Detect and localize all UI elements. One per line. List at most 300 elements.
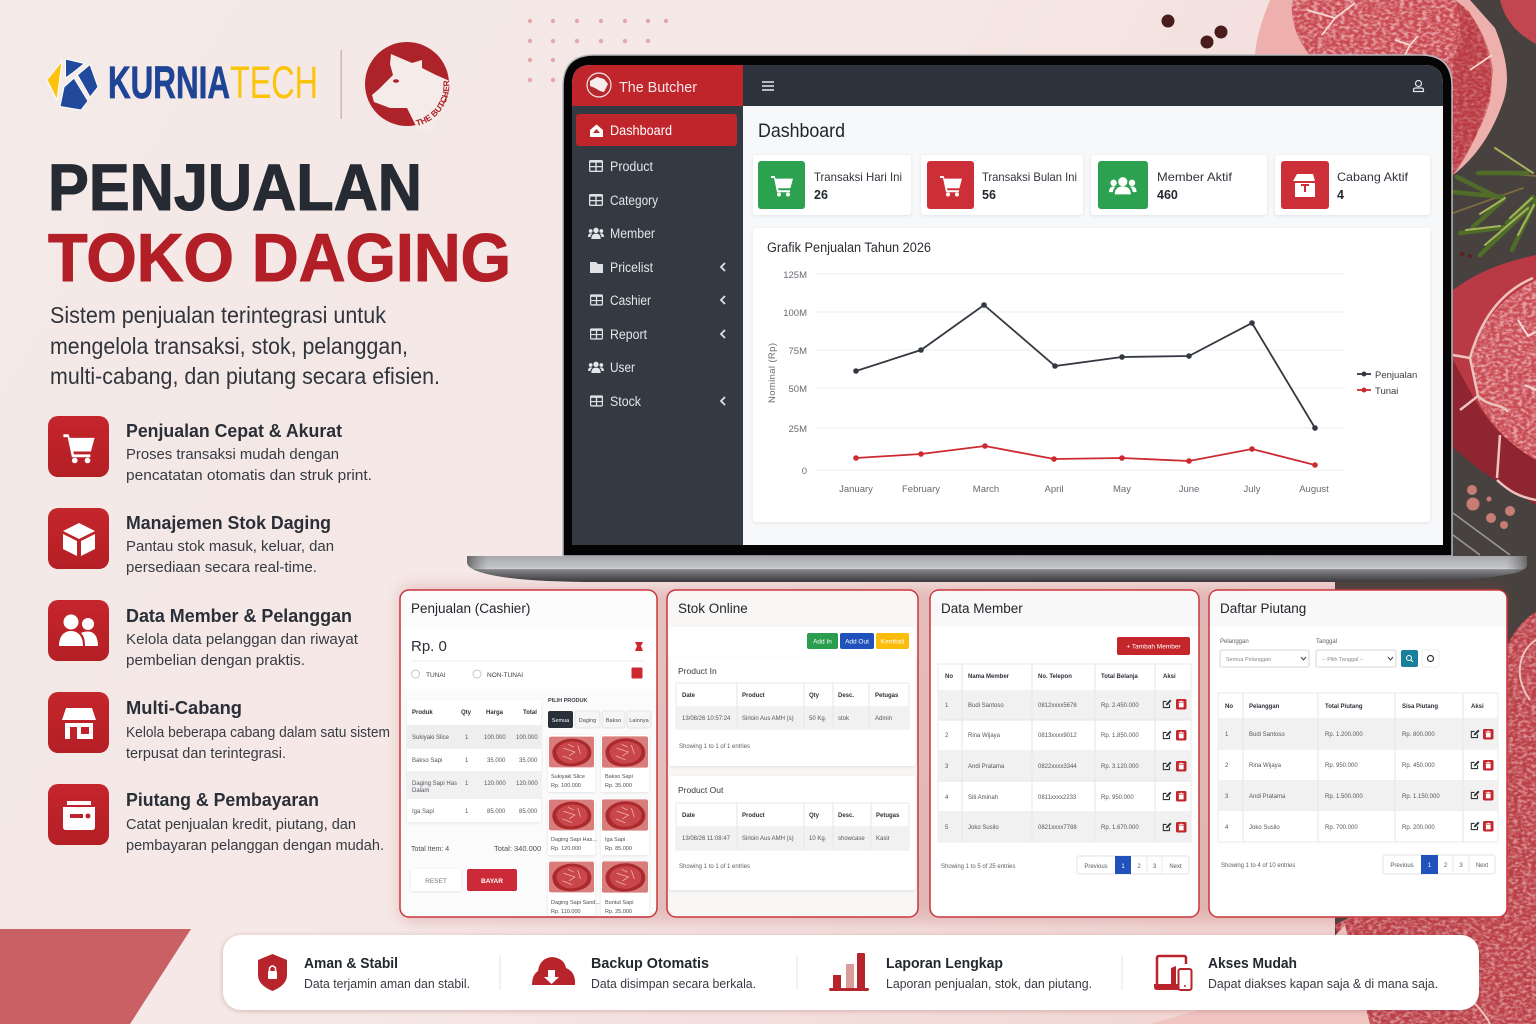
- piutang table: Sisa Piutang: [1402, 704, 1438, 710]
- cashier table: Iga Sapi: [412, 809, 434, 815]
- icon: hexagon mark: [47, 59, 98, 110]
- sidebar brand: [572, 65, 743, 106]
- pagination: Previous: [1084, 864, 1108, 870]
- category tabs: Lainnya: [629, 718, 650, 724]
- member table: Siti Aminah: [968, 795, 998, 801]
- product: iga: Iga Sapi: [605, 837, 625, 843]
- title: [48, 150, 511, 296]
- bottom benefits bar: [223, 935, 1479, 1010]
- menu: Category: Category: [610, 193, 658, 208]
- toolbar: Kembali: [881, 638, 904, 646]
- cashier table: Harga: [486, 710, 504, 716]
- panel: cashier: [400, 590, 657, 917]
- product: has dalam: Rp. 120.000: [551, 846, 581, 852]
- table: product out: Desc.: [838, 813, 854, 819]
- button: refresh: [1422, 650, 1439, 667]
- piutang table: Aksi: [1471, 704, 1484, 710]
- y axis labels: 100M: [783, 308, 807, 319]
- table: product out: [676, 803, 909, 850]
- action icons: [1163, 699, 1186, 832]
- card: product in: Showing 1 to 1 of 1 entries: [679, 744, 750, 750]
- member table: 3: [945, 764, 949, 770]
- piutang table: Rp. 450.000: [1402, 763, 1435, 769]
- menu: Report: Report: [610, 327, 647, 342]
- feature: multi-cabang: Multi-Cabang: [126, 697, 242, 718]
- title: PENJUALAN: [48, 150, 422, 224]
- member table: Rp. 3.120.000: [1101, 764, 1139, 770]
- cashier table: Sukiyaki Slice: [412, 735, 450, 741]
- product: bakso: [601, 735, 649, 792]
- product: has dalam: [548, 798, 597, 855]
- panel heading: Data Member: [941, 601, 1023, 616]
- menu: Pricelist: [590, 260, 725, 275]
- benefit: laporan: Laporan penjualan, stok, dan piutang.: [886, 977, 1092, 991]
- cashier totals: [411, 844, 541, 853]
- member table: 0811xxxx2233: [1038, 795, 1077, 801]
- piutang table: 1: [1225, 732, 1229, 738]
- toolbar: Add Out: [845, 638, 869, 646]
- decorative dot grid: [528, 19, 668, 82]
- icon: user: [1414, 80, 1424, 92]
- cashier table: 35.000: [519, 758, 538, 764]
- sidebar: [572, 65, 743, 545]
- y axis labels: 0: [802, 466, 807, 477]
- button: reset: RESET: [425, 878, 447, 885]
- piutang table: Rp. 1.500.000: [1325, 794, 1363, 800]
- laptop bezel: [563, 55, 1452, 556]
- product: iga: [601, 798, 649, 855]
- x axis labels: April: [1044, 484, 1064, 495]
- benefit: aman: Aman & Stabil: [304, 955, 398, 972]
- benefit: aman: Data terjamin aman dan stabil.: [304, 977, 470, 991]
- stat card: transaksi hari ini: 26: [814, 188, 828, 202]
- y axis labels: 50M: [789, 384, 807, 395]
- laptop: [467, 55, 1527, 582]
- panel: data member: [930, 590, 1199, 917]
- x axis labels: February: [902, 484, 940, 495]
- piutang table: 2: [1225, 763, 1229, 769]
- product: buntut: Buntut Sapi: [605, 900, 633, 906]
- x axis labels: June: [1179, 484, 1199, 495]
- pagination: Next: [1476, 863, 1488, 869]
- pagination: Previous: [1390, 863, 1414, 869]
- decorative meat: right steak: [1453, 255, 1536, 505]
- table: product out: 13/08/26 11:08:47: [682, 836, 731, 842]
- top bar: [743, 65, 1443, 106]
- benefit: backup: Data disimpan secara berkala.: [591, 977, 756, 991]
- benefit: akses: Akses Mudah: [1208, 955, 1297, 972]
- entries text: Showing 1 to 4 of 10 entries: [1221, 863, 1295, 869]
- decorative rosemary sprig: [1453, 148, 1536, 255]
- cashier table: 120.000: [516, 781, 538, 787]
- cashier table: 100.000: [484, 735, 506, 741]
- series: penjualan: [853, 302, 1318, 431]
- cashier total: Rp. 0: [411, 638, 447, 655]
- decorative small peppers: [1460, 252, 1472, 258]
- cashier table: 1: [465, 758, 469, 764]
- table: product out: 10 Kg.: [809, 836, 827, 842]
- benefit: laporan: Laporan Lengkap: [886, 955, 1003, 972]
- member table: Rp. 1.670.000: [1101, 825, 1139, 831]
- logo divider: [340, 50, 342, 119]
- menu: User: [588, 360, 635, 375]
- feature: multi-cabang: [48, 692, 390, 762]
- card: product in: [669, 657, 916, 766]
- member table: Total Belanja: [1101, 674, 1139, 680]
- member table: Nama Member: [968, 674, 1010, 680]
- icon: cloud: [532, 957, 575, 985]
- product heading: PILIH PRODUK: [548, 698, 587, 704]
- card: product out: Product Out: [678, 785, 724, 795]
- feature: manajemen stok: persediaan secara real-time.: [126, 559, 317, 576]
- feature: manajemen stok: Manajemen Stok Daging: [126, 512, 331, 533]
- stat card: transaksi bulan ini: Transaksi Bulan Ini: [982, 170, 1077, 184]
- panel: daftar piutang: [1209, 590, 1507, 917]
- table: product in: Admin: [875, 716, 892, 722]
- entries text: Showing 1 to 5 of 25 entries: [941, 864, 1015, 870]
- pagination: 2: [1137, 864, 1141, 870]
- pagination: 3: [1153, 864, 1157, 870]
- stat card: transaksi hari ini: Transaksi Hari Ini: [814, 170, 902, 184]
- pagination: 3: [1459, 863, 1463, 869]
- toolbar: [669, 627, 916, 657]
- benefit: laporan: [829, 953, 1092, 991]
- decorative meat: top steak: [1255, 0, 1507, 175]
- filters: Tanggal: [1316, 639, 1337, 645]
- filters: -- Pilih Tanggal --: [1322, 657, 1364, 663]
- sidebar brand: The Butcher: [619, 79, 697, 96]
- piutang table: Pelanggan: [1249, 704, 1280, 710]
- feature: data member: Data Member & Pelanggan: [126, 605, 352, 626]
- feature: data member: pembelian dengan praktis.: [126, 652, 305, 669]
- y axis labels: 125M: [783, 270, 807, 281]
- stat card: member aktif: 460: [1157, 188, 1178, 202]
- button: bayar: BAYAR: [481, 878, 503, 885]
- action icons: [1471, 729, 1494, 832]
- decorative meat: top right corner: [1500, 0, 1536, 44]
- subtitle: mengelola transaksi, stok, pelanggan,: [50, 333, 408, 359]
- cashier table: Daging Sapi Has: [412, 781, 457, 787]
- product: buntut: [601, 861, 649, 916]
- filters: [1220, 639, 1439, 667]
- benefit: backup: [532, 955, 756, 991]
- stat card: member aktif: Member Aktif: [1157, 170, 1233, 184]
- card: product in: Product In: [678, 666, 717, 676]
- product: sandung: [548, 861, 600, 916]
- x axis labels: July: [1244, 484, 1261, 495]
- chart title: Grafik Penjualan Tahun 2026: [767, 240, 931, 255]
- menu: User: User: [610, 360, 635, 375]
- pagination: [1383, 855, 1495, 874]
- chart legend: [1357, 370, 1417, 397]
- cashier totals: Total: 340.000: [494, 844, 541, 853]
- y axis labels: 75M: [789, 346, 807, 357]
- product: has dalam: Daging Sapi Has...: [551, 837, 597, 843]
- x axis labels: August: [1299, 484, 1329, 495]
- cashier table: Qty: [461, 710, 472, 716]
- card: product out: Showing 1 to 1 of 1 entries: [679, 864, 750, 870]
- icon: wallet: [48, 784, 109, 845]
- feature: penjualan cepat: [48, 416, 372, 484]
- icon: cart: [48, 416, 109, 477]
- member table: No: [945, 674, 953, 680]
- product: sukiyaki: Rp. 100.000: [551, 783, 581, 789]
- feature: piutang: [48, 784, 384, 854]
- button: bayar: [467, 869, 517, 891]
- panel heading: Penjualan (Cashier): [411, 601, 530, 616]
- menu: Stock: Stock: [610, 394, 641, 409]
- pagination: 1: [1121, 864, 1125, 870]
- member table: No. Telepon: [1038, 674, 1072, 680]
- product: sukiyaki: Sukiyaki Slice: [551, 774, 585, 780]
- product: sukiyaki: [548, 735, 595, 792]
- icon: box: [48, 508, 109, 569]
- product: bakso: Bakso Sapi: [605, 774, 633, 780]
- benefit: aman: [258, 954, 470, 991]
- piutang table: Total Piutang: [1325, 704, 1363, 710]
- cashier table: 85.000: [487, 809, 506, 815]
- cashier table: 120.000: [484, 781, 506, 787]
- piutang table: Rina Wijaya: [1249, 763, 1282, 769]
- benefit: akses: [1154, 955, 1438, 991]
- decorative red corner band: [0, 929, 191, 1024]
- member table: Rp. 1.850.000: [1101, 733, 1139, 739]
- logo text: THE BUTCHER: [415, 80, 450, 126]
- feature: penjualan cepat: Proses transaksi mudah dengan: [126, 446, 339, 463]
- piutang table: Budi Santoso: [1249, 732, 1285, 738]
- menu: Stock: [590, 394, 725, 409]
- product: iga: Rp. 85.000: [605, 846, 632, 852]
- cashier table: 35.000: [487, 758, 506, 764]
- menu: Category: [589, 193, 658, 208]
- panel heading: Stok Online: [678, 601, 748, 616]
- member table: Rp. 950.000: [1101, 795, 1134, 801]
- member table: 2: [945, 733, 949, 739]
- product: bakso: Rp. 35.000: [605, 783, 632, 789]
- icon: store: [48, 692, 109, 753]
- piutang table: Rp. 1.150.000: [1402, 794, 1440, 800]
- logo: The Butcher: [365, 42, 450, 126]
- wordmark: TECH: [230, 57, 318, 108]
- feature: manajemen stok: [48, 508, 334, 576]
- cashier table: 85.000: [519, 809, 538, 815]
- member table: 0813xxxx9012: [1038, 733, 1077, 739]
- stat card: cabang aktif: Cabang Aktif: [1337, 170, 1409, 184]
- icon: devices: [1154, 956, 1192, 990]
- table: product out: Date: [682, 813, 696, 819]
- gridlines: [815, 274, 1345, 470]
- member table: [938, 664, 1191, 842]
- member table: Aksi: [1163, 674, 1176, 680]
- piutang table: Rp. 200.000: [1402, 825, 1435, 831]
- table: product in: Sirloin Aus AMH (s): [742, 716, 794, 722]
- panel header: [931, 591, 1198, 627]
- subtitle: [50, 302, 440, 389]
- wordmark: KURNIA: [108, 57, 230, 108]
- table: product in: [676, 683, 909, 729]
- x axis labels: January: [839, 484, 873, 495]
- cashier total: [401, 627, 656, 689]
- cashier table: 100.000: [516, 735, 538, 741]
- cashier table: Produk: [412, 710, 433, 716]
- piutang table: Rp. 950.000: [1325, 763, 1358, 769]
- cashier table: 1: [465, 735, 469, 741]
- piutang table: Rp. 700.000: [1325, 825, 1358, 831]
- filters: Semua Pelanggan: [1226, 657, 1271, 663]
- page heading: Dashboard: [758, 120, 845, 142]
- menu: Member: [588, 226, 655, 241]
- cashier totals: Total Item: 4: [411, 846, 449, 853]
- panel header: [1210, 591, 1506, 627]
- stat card: cabang aktif: [1275, 155, 1430, 215]
- menu: Dashboard: [576, 114, 737, 146]
- button: reset: [411, 869, 461, 891]
- category tabs: Daging: [579, 718, 596, 724]
- chart legend: Tunai: [1375, 386, 1398, 397]
- filters: Pelanggan: [1220, 639, 1249, 645]
- dark slate surface: [1335, 0, 1536, 950]
- piutang table: Rp. 800.000: [1402, 732, 1435, 738]
- member table: Rp. 2.450.000: [1101, 703, 1139, 709]
- decorative peppercorns: [1162, 14, 1228, 48]
- piutang table: Andi Pratama: [1249, 794, 1286, 800]
- benefit: akses: Dapat diakses kapan saja & di mana saja.: [1208, 977, 1438, 991]
- feature: piutang: Catat penjualan kredit, piutang, dan: [126, 816, 356, 833]
- button: tambah member: + Tambah Member: [1126, 644, 1181, 650]
- pagination: [1077, 856, 1189, 874]
- decorative metal utensil: [1453, 513, 1510, 555]
- piutang table: No: [1225, 704, 1233, 710]
- feature: data member: Kelola data pelanggan dan riwayat: [126, 631, 359, 648]
- product: buntut: Rp. 25.000: [605, 909, 632, 915]
- table: product in: Date: [682, 693, 696, 699]
- pagination: Next: [1169, 864, 1182, 870]
- decorative meat: lower right steak: [1150, 612, 1536, 1024]
- feature: multi-cabang: terpusat dan terintegrasi.: [126, 745, 286, 762]
- y axis labels: [783, 270, 807, 477]
- feature: multi-cabang: Kelola beberapa cabang dalam satu sistem: [126, 724, 390, 741]
- series: tunai: [853, 443, 1318, 468]
- chart legend: Penjualan: [1375, 370, 1417, 381]
- table: product in: Qty: [809, 693, 820, 699]
- member table: Rina Wijaya: [968, 733, 1001, 739]
- piutang table: 3: [1225, 794, 1229, 800]
- menu: Product: [589, 159, 653, 174]
- cashier table: 1: [465, 809, 469, 815]
- product: sandung: Daging Sapi Sand...: [551, 900, 600, 906]
- dashboard screen: [572, 65, 1443, 545]
- table: product out: Kasir: [876, 836, 890, 842]
- cashier total: TUNAI: [426, 672, 446, 679]
- icon: hamburger: [762, 82, 774, 90]
- cashier table: Total: [523, 710, 537, 716]
- cashier total: NON-TUNAI: [487, 672, 523, 679]
- stat card: member aktif: [1091, 155, 1267, 215]
- category tabs: [548, 711, 651, 728]
- icon: people: [48, 600, 109, 661]
- button: tambah member: [1117, 637, 1190, 655]
- member table: 0821xxxx7788: [1038, 825, 1077, 831]
- table: product in: Petugas: [875, 693, 899, 699]
- table: product out: Petugas: [876, 813, 900, 819]
- y axis labels: 25M: [789, 424, 807, 435]
- card: product out: [669, 776, 916, 890]
- y axis title: Nominal (Rp): [767, 343, 778, 403]
- member table: 1: [945, 703, 949, 709]
- x axis labels: May: [1113, 484, 1131, 495]
- pagination: 2: [1444, 863, 1448, 869]
- member table: Joko Susilo: [968, 825, 999, 831]
- table: product out: Sirloin Aus AMH (s): [742, 836, 794, 842]
- member table: Budi Santoso: [968, 703, 1004, 709]
- subtitle: Sistem penjualan terintegrasi untuk: [50, 302, 386, 328]
- cashier table: Dalam: [412, 788, 429, 794]
- piutang table: 4: [1225, 825, 1229, 831]
- table: product in: stok: [838, 716, 850, 722]
- member table: 0822xxxx3344: [1038, 764, 1077, 770]
- category tabs: Semua: [552, 718, 570, 724]
- menu: Report: [590, 327, 725, 342]
- stat card: cabang aktif: 4: [1337, 188, 1344, 202]
- member table: Andi Pratama: [968, 764, 1005, 770]
- pagination: 1: [1428, 863, 1432, 869]
- cashier table: 1: [465, 781, 469, 787]
- icon: cow head: [372, 54, 452, 135]
- table: product out: Qty: [809, 813, 820, 819]
- feature: manajemen stok: Pantau stok masuk, keluar, dan: [126, 538, 334, 555]
- table: product in: Product: [742, 693, 765, 699]
- category tabs: Bakso: [606, 718, 621, 724]
- stat card: transaksi bulan ini: 56: [982, 188, 996, 202]
- feature: data member: [48, 600, 359, 669]
- panel: stok online: [667, 590, 918, 917]
- feature: penjualan cepat: pencatatan otomatis dan struk print.: [126, 467, 372, 484]
- product cards: [548, 735, 649, 916]
- cashier table: [407, 700, 541, 822]
- button: search: [1401, 650, 1418, 667]
- menu: Cashier: Cashier: [610, 293, 651, 308]
- subtitle: multi-cabang, dan piutang secara efisien.: [50, 363, 440, 389]
- feature: piutang: pembayaran pelanggan dengan mudah.: [126, 837, 384, 854]
- decorative pink peppercorns: [1466, 485, 1515, 529]
- product: sandung: Rp. 110.000: [551, 909, 581, 915]
- table: product out: showcase: [838, 836, 865, 842]
- chart card: [753, 228, 1430, 522]
- table: product in: 50 Kg.: [809, 716, 827, 722]
- member table: 4: [945, 795, 949, 801]
- icon: bar chart: [829, 953, 869, 991]
- menu: Cashier: [590, 293, 725, 308]
- stat card: transaksi hari ini: [753, 155, 911, 215]
- piutang table: [1218, 693, 1498, 842]
- logo: Kurniatech: [47, 57, 318, 110]
- title: TOKO DAGING: [48, 220, 511, 296]
- laptop base: [467, 556, 1527, 582]
- cashier table: Bakso Sapi: [412, 758, 442, 764]
- x axis labels: March: [973, 484, 999, 495]
- piutang table: Rp. 1.200.000: [1325, 732, 1363, 738]
- icon: shield: [258, 954, 287, 991]
- table: product out: Product: [742, 813, 765, 819]
- x axis labels: [839, 484, 1329, 495]
- menu: Member: Member: [610, 226, 655, 241]
- benefit: backup: Backup Otomatis: [591, 955, 709, 972]
- table: product in: Desc.: [838, 693, 854, 699]
- member table: 5: [945, 825, 949, 831]
- menu: Product: Product: [610, 159, 653, 174]
- stat card: transaksi bulan ini: [921, 155, 1083, 215]
- menu: Pricelist: Pricelist: [610, 260, 653, 275]
